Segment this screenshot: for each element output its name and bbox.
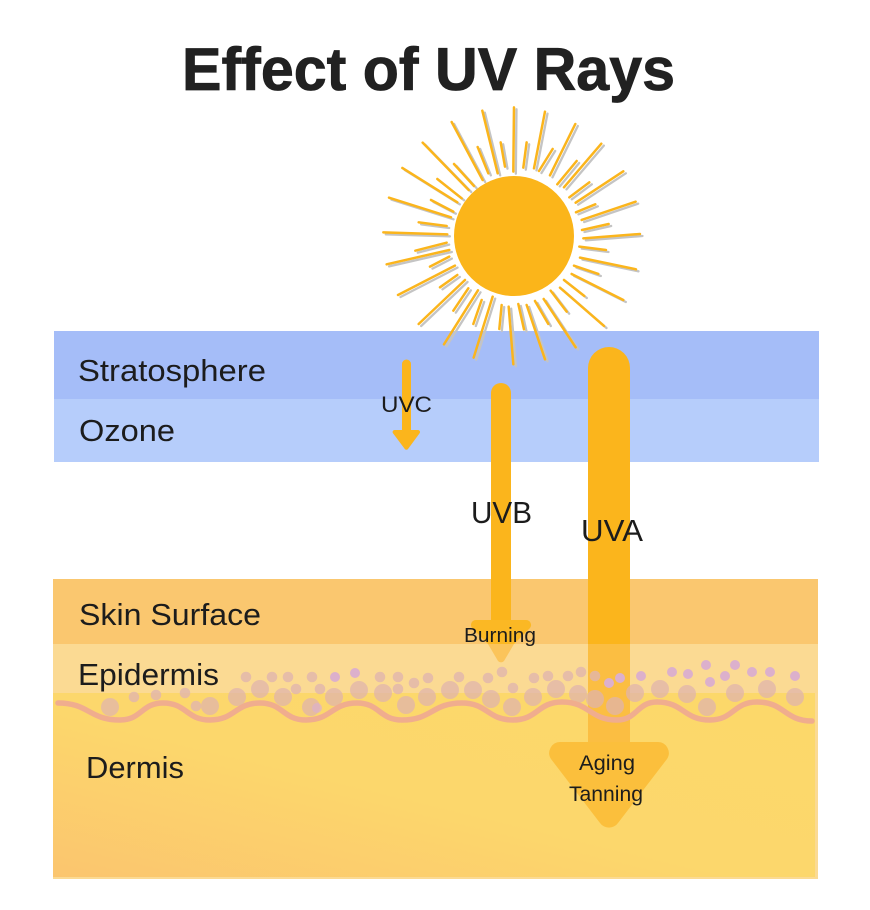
arrow: UVA (549, 347, 669, 828)
arrow: UVC (393, 360, 420, 450)
layer: skin surface band (53, 579, 818, 644)
sun rays (383, 107, 640, 364)
label: Epidermis: Epidermis (78, 657, 219, 692)
sun disc (454, 176, 574, 296)
UVB head upper (471, 620, 531, 644)
label: UVA: UVA (581, 513, 643, 548)
layer: stratosphere band (54, 331, 819, 399)
label: Burning: Burning (464, 625, 536, 647)
UVB head lower (488, 644, 514, 662)
UVA head (549, 742, 669, 828)
UVA shaft upper (588, 347, 630, 644)
purple cells (312, 660, 800, 713)
panel: skin layers (53, 579, 818, 879)
title: Effect of UV Rays (182, 36, 675, 103)
label: Stratosphere: Stratosphere (78, 353, 266, 388)
layer: dermis band (53, 693, 815, 877)
label: UVC: UVC (381, 392, 432, 417)
label: Ozone: Ozone (79, 413, 175, 448)
label: Skin Surface: Skin Surface (79, 597, 261, 632)
UVB shaft (491, 383, 511, 644)
label: Dermis: Dermis (86, 750, 184, 785)
label: UVB: UVB (471, 495, 532, 530)
layer: ozone band (54, 399, 819, 462)
skin cells (101, 660, 804, 716)
small cells (129, 667, 600, 711)
wave: skin boundary (58, 702, 812, 721)
label: Aging: Aging (579, 752, 635, 775)
layer: epidermis band (53, 644, 818, 879)
panel: atmosphere layers (54, 331, 819, 462)
large cells (101, 680, 804, 716)
sun ray shadows (386, 109, 642, 366)
arrow: UVB (471, 383, 531, 662)
UVA shaft lower (588, 644, 630, 742)
label: Tanning: Tanning (569, 783, 643, 806)
icon: sun (383, 107, 642, 366)
